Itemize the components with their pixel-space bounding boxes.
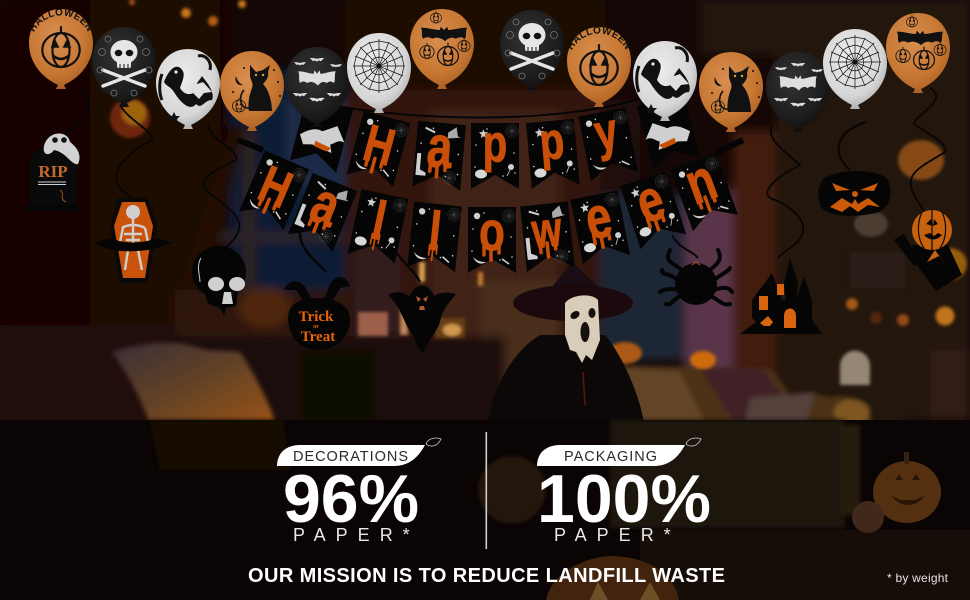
balloon: orange bats and pumpkins [410,9,474,89]
balloon: black bats right [766,52,830,132]
right sofa [610,365,872,424]
decoration: spider [660,250,732,305]
background: dim living room [0,0,970,426]
balloon: orange black cat right [699,52,763,132]
balloon: orange Halloween pumpkin right: HALLOWEEN [566,26,631,50]
label pill: decorations: DECORATIONS [293,449,408,465]
value: 100%: 100% [537,461,711,537]
decoration: black skull [192,246,246,316]
flag: e: e [580,184,617,253]
flag: o: o [479,202,505,262]
flag: H: H [251,154,300,219]
flag: bat cat right [637,94,700,170]
decoration: coffin with skeleton [93,198,172,283]
value: 96%: 96% [283,461,419,537]
flag: l [348,187,409,264]
banner: Happy row [290,94,700,191]
flag: n [667,144,738,231]
garland strings [238,92,743,153]
flag: e second: e [628,167,672,237]
label pill: decorations [277,438,441,466]
decoration: evil pumpkin [818,171,891,216]
flag: a: a [425,114,456,181]
divider [486,432,487,549]
decoration: Trick or Treat cauldron [284,277,350,350]
label pill: packaging: PACKAGING [564,449,657,465]
stat: packaging 100% paper [537,438,711,545]
decoration: RIP tombstone with ghost: RIP [38,162,68,181]
flag: l: l [367,191,391,252]
decoration: RIP tombstone with ghost [26,133,80,211]
flag: H [239,151,309,230]
flag: a: a [302,170,350,240]
banner: Halloween row [239,144,738,273]
caption band [0,420,970,600]
flag: n: n [677,147,725,218]
balloon: black skull and crossbones right [500,10,564,90]
flag: e [569,182,630,264]
flag: o [468,202,516,273]
label pill: packaging [537,438,701,466]
balloon: white ghost and bat right [633,41,697,121]
decoration: Trick or Treat cauldron: Trick [299,309,334,325]
mission statement: OUR MISSION IS TO REDUCE LANDFILL WASTE [248,565,725,587]
decoration: Trick or Treat cauldron: or [313,324,319,330]
balloon: black bats [285,47,349,127]
flag: bat cat left [290,97,353,173]
dim scenery inside caption band [150,420,970,600]
balloon: orange Halloween pumpkin: HALLOWEEN [28,8,93,32]
balloon: orange bats and pumpkins right [886,13,950,93]
flag: y [577,99,638,181]
caption: paper: PAPER* [293,525,420,545]
balloon: orange Halloween pumpkin [28,8,93,89]
flag: p [471,114,519,189]
balloon: black skull and crossbones [92,27,156,107]
balloon: orange black cat [220,51,284,131]
hanging swirl strings [66,86,946,282]
balloon: white ghost and bat [156,49,220,129]
flag: a [412,113,467,191]
flag: H: H [358,113,401,177]
flag: e second [618,163,686,249]
blanket on left sofa [112,343,276,424]
flag: p second [525,110,580,189]
flag: w: w [528,202,565,260]
flag: p second: p [537,111,566,171]
decoration: black ghost [388,286,456,353]
caption: paper: PAPER* [554,525,681,545]
flag: l second [407,199,462,272]
balloon: white spider web [347,33,411,113]
balloon: orange Halloween pumpkin right [566,26,631,107]
flag: w [520,201,575,272]
stat: decorations 96% paper [277,438,441,545]
flag: l second: l [426,201,444,263]
footnote: * by weight [887,571,949,585]
balloons [28,8,950,132]
balloon: white spider web right [823,29,887,109]
flag: H [347,111,410,187]
decoration: Trick or Treat cauldron: Treat [301,329,335,345]
flag: a [288,166,360,252]
flag: p: p [483,114,507,172]
witch figure with ghost mask [488,262,644,424]
decoration: pumpkin-head ghost with broom [894,210,962,291]
flag: y: y [589,101,622,162]
decoration: haunted house [740,258,822,334]
